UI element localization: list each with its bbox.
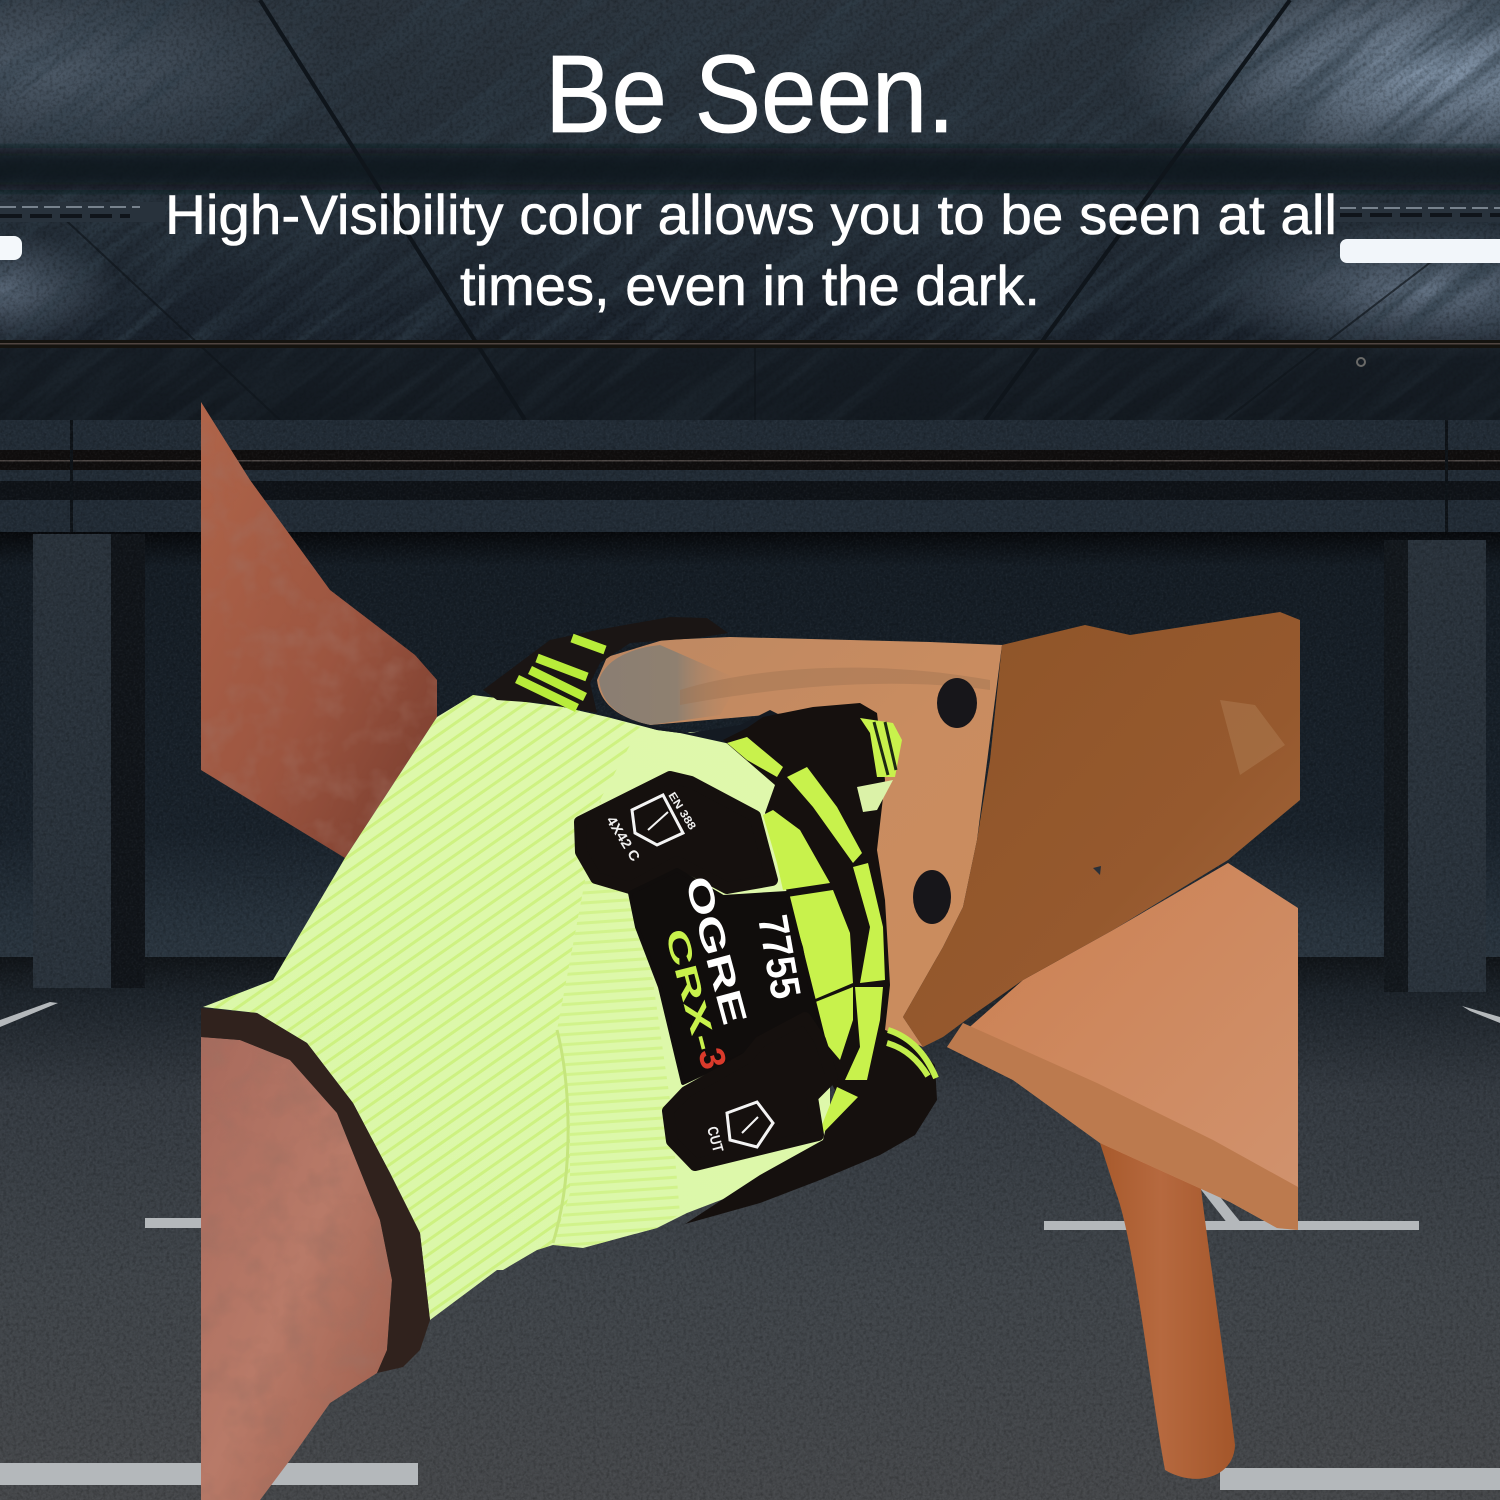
glove knit body: [203, 695, 830, 1320]
lights: [0, 236, 22, 260]
wood board: [947, 863, 1298, 1230]
bright green pads: [727, 718, 902, 1133]
pale finger pad: [857, 780, 893, 812]
central logo pad: [630, 870, 823, 1083]
pillars: [33, 534, 111, 988]
text: model 3: 3: [690, 1043, 735, 1073]
finger: [1100, 1143, 1235, 1479]
blade hole: [1093, 866, 1101, 875]
text: 7755 model number: 7755: [749, 911, 810, 1002]
floor: [0, 957, 1500, 1500]
text: OGRE logo: OGRE: [677, 872, 754, 1029]
forearm: lower: [201, 1037, 396, 1500]
pipe hanger: [1357, 358, 1365, 366]
text: EN 388 rating: EN 388: [665, 790, 698, 832]
icon: ANSI cut shield: [727, 1102, 773, 1147]
concrete beam: [0, 420, 1500, 538]
saw handle: [597, 637, 1002, 1047]
icon: EN 388 shield: [632, 795, 683, 845]
ceiling: [0, 0, 1500, 420]
concrete texture: [0, 420, 1500, 1500]
saw blade: [903, 612, 1300, 1047]
lower finger stripes: [887, 1030, 936, 1078]
saw handle and wooden board: [597, 612, 1300, 1479]
text: 4X42 C rating: 4X42 C: [603, 813, 644, 864]
glove ribs left: [203, 695, 640, 1320]
text: CRX logo: CRX-: [658, 925, 723, 1055]
top finger band: [483, 617, 728, 713]
top finger stripes: [517, 638, 605, 708]
dark gap below handle: [597, 710, 800, 745]
glove ribs right: [553, 800, 680, 1248]
text: ANSI cut: CUT: [703, 1125, 726, 1154]
lower ceiling shade: [0, 345, 1500, 420]
subtitle line 1: High-Visibility color allows you to be seen at all: [165, 183, 1337, 246]
back wall: [0, 532, 1500, 962]
blade highlight: [1220, 700, 1285, 775]
glove: [201, 617, 937, 1373]
floor markings: [0, 1002, 1500, 1490]
forearm: upper: [201, 402, 441, 862]
shadow band: [0, 148, 1500, 190]
handle rivets: [937, 678, 977, 728]
lower logo pad: [668, 1018, 832, 1165]
subtitle line 2: times, even in the dark.: [460, 254, 1040, 317]
title: Be Seen.: [545, 33, 955, 156]
finger tip stripes: [874, 722, 896, 775]
board side face: [947, 1023, 1298, 1230]
ceiling pipe: [0, 340, 1500, 348]
outer impact guard: [685, 703, 937, 1224]
worn handle streak: [680, 668, 990, 705]
subtitle: [165, 183, 1337, 317]
glove fold: [553, 1030, 568, 1243]
upper logo pad: [580, 777, 772, 888]
worn handle patch: [599, 645, 740, 725]
cable trays: [0, 202, 165, 222]
glove cuff: [201, 1008, 430, 1373]
